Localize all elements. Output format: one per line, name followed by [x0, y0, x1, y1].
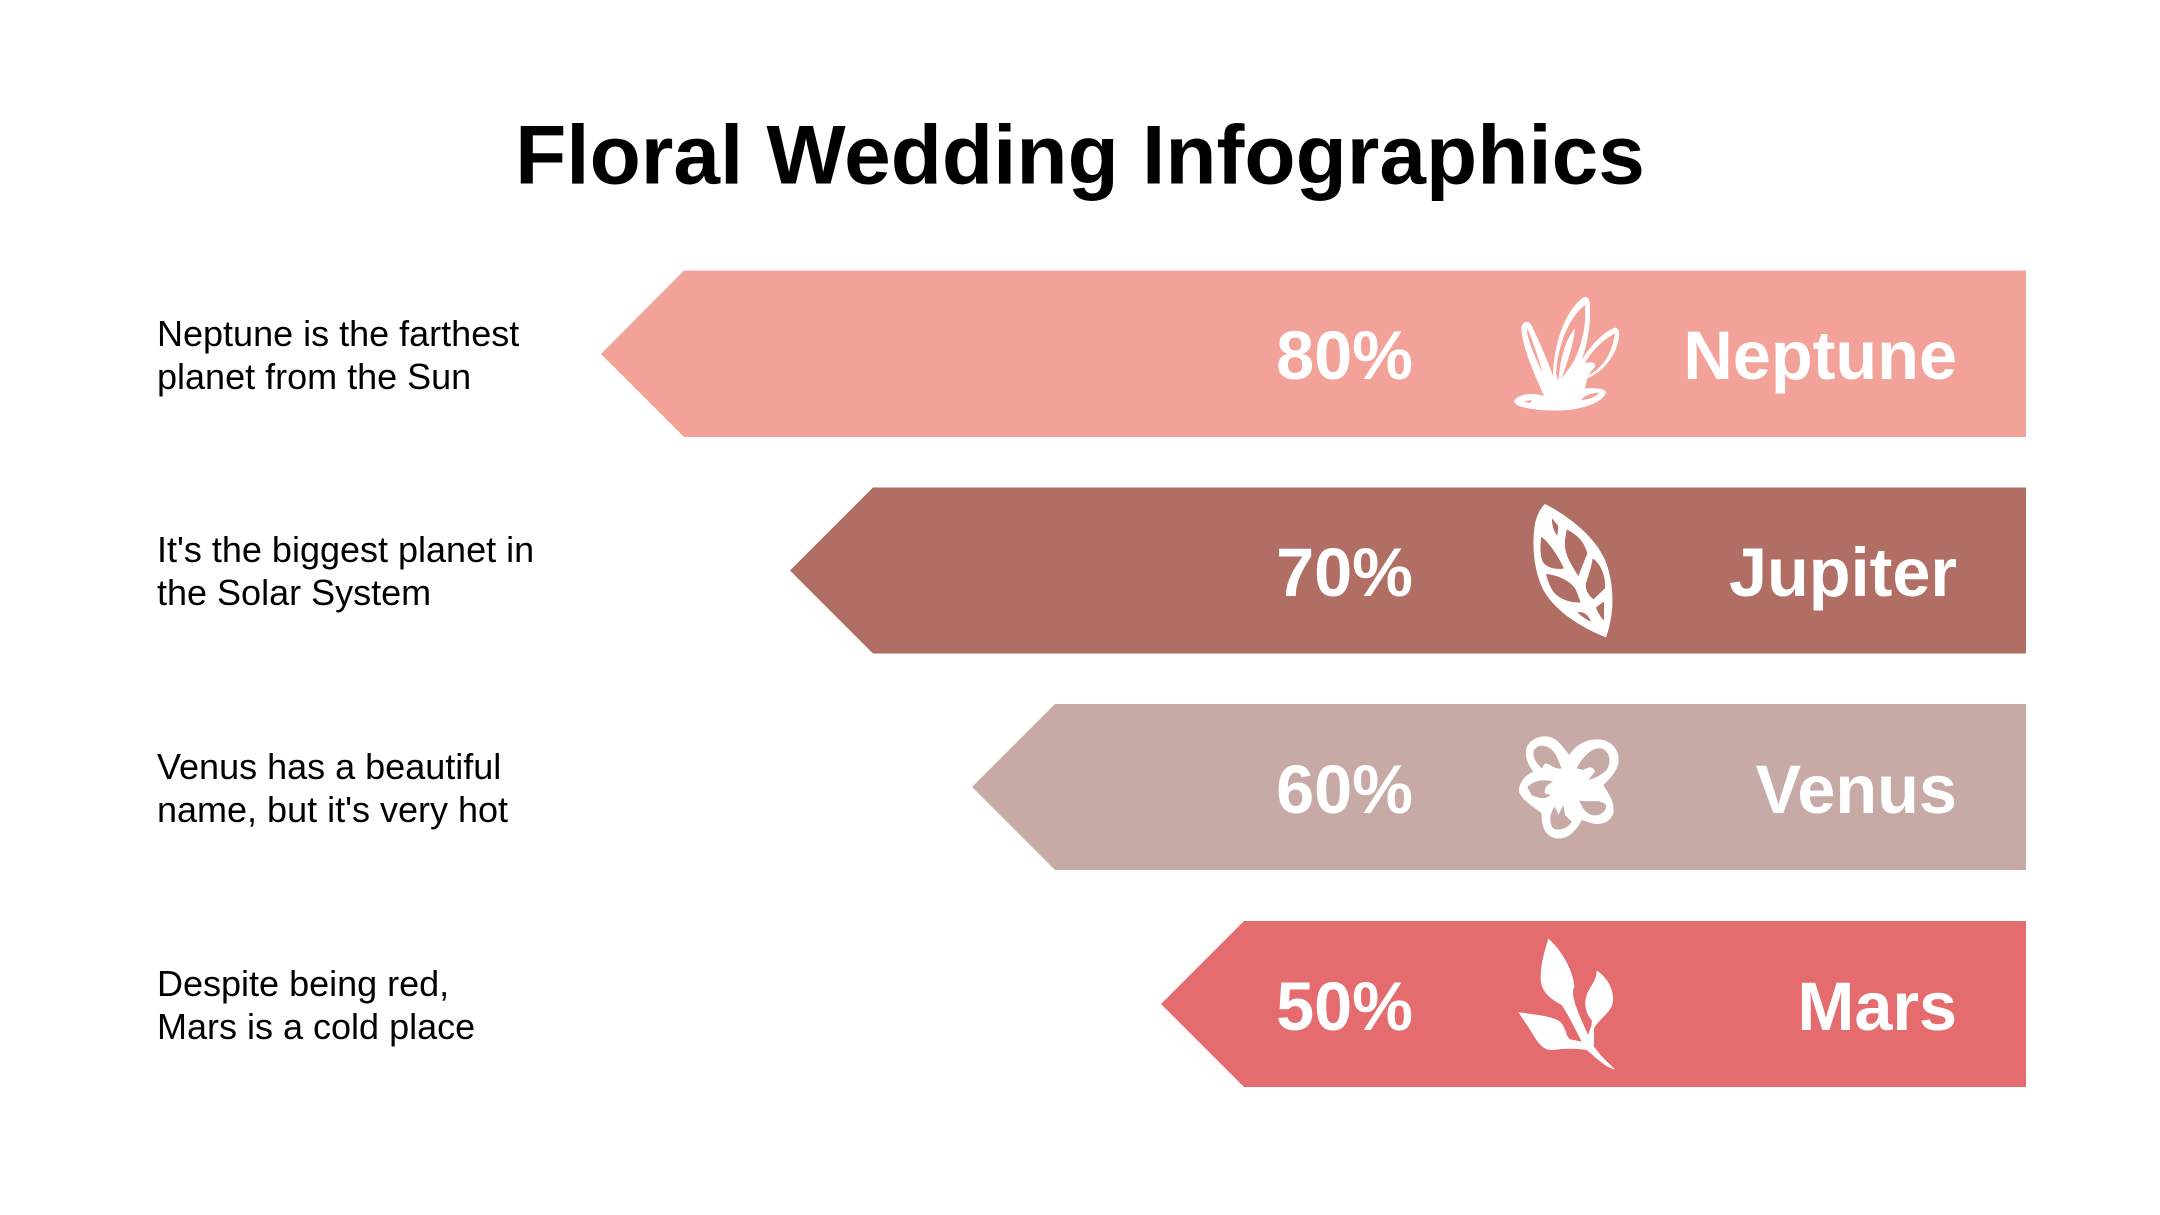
icon: sprig [1518, 939, 1615, 1069]
description: Jupiter: It's the biggest planet in [157, 529, 534, 570]
arrow bar: Venus [972, 704, 2026, 870]
description: Jupiter: the Solar System [157, 572, 431, 613]
name: Neptune: Neptune [1683, 318, 1957, 394]
percentage: Neptune: 80% [1276, 318, 1413, 394]
title: Floral Wedding Infographics [515, 108, 1645, 202]
row: Jupiter [157, 488, 2026, 654]
percentage: Jupiter: 70% [1276, 535, 1413, 611]
percentage: Mars: 50% [1276, 969, 1413, 1045]
arrow bar: Neptune [601, 270, 2026, 437]
description: Neptune: planet from the Sun [157, 356, 471, 397]
description: Venus: name, but it's very hot [157, 789, 508, 830]
icon: flower [1519, 736, 1619, 839]
row: Neptune [157, 270, 2026, 437]
name: Venus: Venus [1756, 752, 1957, 828]
icon: plant sprout [1514, 297, 1619, 411]
row: Venus [157, 704, 2026, 870]
name: Jupiter: Jupiter [1729, 535, 1957, 611]
row: Mars [157, 921, 2026, 1087]
name: Mars: Mars [1797, 969, 1957, 1045]
arrow bar: Mars [1161, 921, 2026, 1087]
percentage: Venus: 60% [1276, 752, 1413, 828]
description: Neptune: Neptune is the farthest [157, 313, 519, 354]
arrow bar: Jupiter [790, 488, 2026, 654]
description: Mars: Despite being red, [157, 963, 449, 1004]
description: Venus: Venus has a beautiful [157, 746, 501, 787]
icon: leaf [1533, 504, 1612, 637]
description: Mars: Mars is a cold place [157, 1006, 475, 1047]
